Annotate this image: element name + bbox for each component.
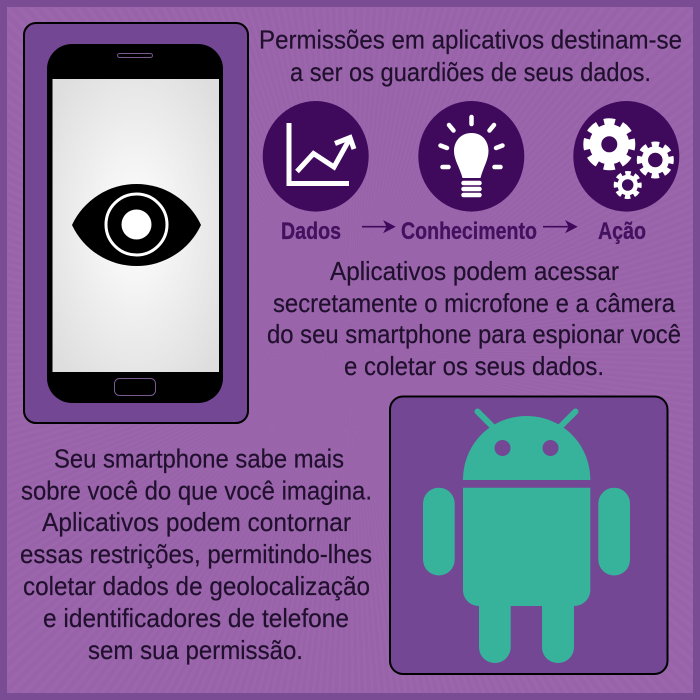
text block: smartphone sabe mais: Aplicativos podem contornar [42, 507, 351, 537]
icon: smartphone body [47, 44, 223, 403]
text block: smartphone sabe mais: Seu smartphone sabe mais [54, 444, 344, 474]
text block: smartphone sabe mais: essas restrições, permitindo-lhes [20, 539, 372, 569]
text block: smartphone sabe mais [20, 444, 372, 665]
label: Conhecimento: Conhecimento [401, 218, 537, 245]
smartphone home button [114, 378, 156, 396]
icon: data chart [263, 101, 369, 212]
text block: smartphone sabe mais: e identificadores de telefone [43, 603, 349, 633]
text block: smartphone sabe mais: sem sua permissão. [88, 635, 303, 665]
icon: gears [573, 101, 679, 212]
heading [259, 24, 682, 87]
text block: microfone e câmera: e coletar os seus dados. [344, 351, 604, 381]
icon: android robot [423, 412, 630, 663]
panel: android [390, 396, 668, 674]
text block: microfone e câmera [267, 256, 681, 381]
icon: eye [72, 184, 201, 266]
text block: microfone e câmera: Aplicativos podem acessar [330, 256, 619, 286]
text block: microfone e câmera: secretamente o microfone e a câmera [273, 288, 675, 318]
panel: phone with eye [24, 23, 248, 423]
arrow: conhecimento to acao [543, 222, 576, 231]
smartphone speaker [118, 54, 152, 58]
arrow: dados to conhecimento [362, 222, 394, 231]
label: Dados: Dados [281, 218, 341, 245]
icon: light bulb [418, 101, 524, 212]
text block: smartphone sabe mais: sobre você do que você imagina. [21, 476, 372, 506]
text block: smartphone sabe mais: coletar dados de geolocalização [23, 571, 370, 601]
label: Ação: Ação [598, 218, 646, 245]
heading: a ser os guardiões de seus dados. [290, 57, 651, 87]
